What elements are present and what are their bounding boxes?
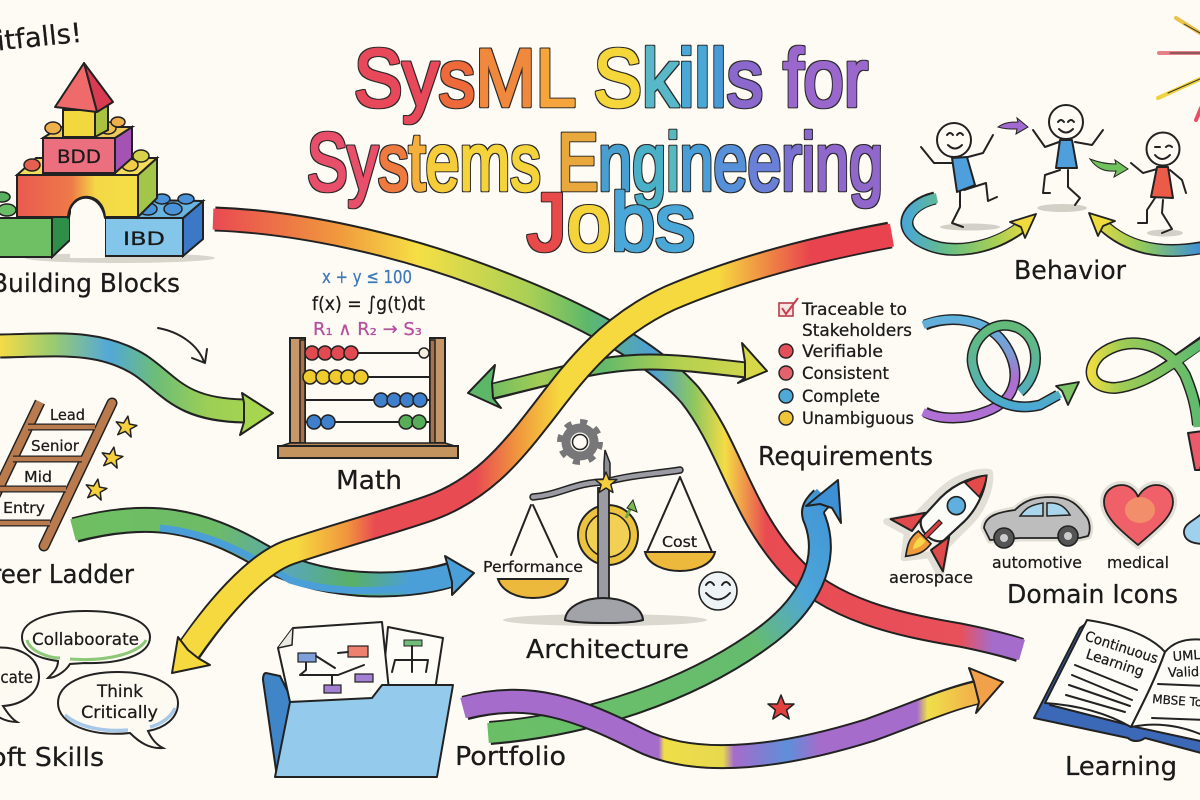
document: small diagram [382,627,443,690]
rainbow arch block [17,150,157,258]
loop ribbons [923,320,1200,470]
document: block diagram [278,622,390,702]
blue IBD block [105,194,203,256]
ladder [0,402,112,548]
bubble: think critically: Critically [81,703,158,723]
pan labels: Performance [483,558,583,576]
label: domain icons: Domain Icons [1007,580,1178,610]
ribbon: blocks to learning [213,219,1022,650]
left page [1045,620,1165,727]
equations: x + y ≤ 100 [322,267,412,288]
balance beam [533,470,680,497]
checklist text [801,300,914,429]
label: learning: Learning [1065,752,1177,782]
panel: domain icons [877,445,1200,610]
bubble: communicate [0,648,39,722]
checkbox [779,298,798,316]
pan labels: Cost [662,533,697,551]
ladder rung labels: Senior [31,437,80,455]
dancer one [921,123,997,227]
stars [84,414,138,501]
domain labels: medical [1107,553,1169,572]
equations: R₁ ∧ R₂ → S₃ [313,319,422,340]
gear [560,422,600,462]
folder back [263,673,300,777]
panel: learning book [1034,620,1200,782]
panel: soft skills [0,611,178,773]
ribbon: career ladder to architecture [73,520,474,595]
label: behavior: Behavior [1014,256,1126,286]
ribbon: portfolio to requirements [488,480,841,733]
dancer two [1033,105,1103,205]
dancer three [1131,132,1186,233]
ladder rung labels: Entry [3,499,45,517]
right page [1131,639,1200,736]
hand-drawn pointer arrow [158,328,207,363]
bubble: think critically: Think [96,682,143,702]
book text: Learning [1084,647,1146,680]
right pan [645,477,715,571]
ribbon: pitfalls to math [0,345,273,435]
checklist text: Traceable to [801,300,907,320]
title [307,33,883,268]
BDD block [43,117,132,173]
ground shadow [503,614,707,626]
panel: architecture [483,422,737,665]
balance post and base [565,450,643,623]
red star [768,695,794,719]
book cover [1034,622,1200,754]
panel: building blocks [0,63,215,263]
checklist text: Verifiable [802,342,883,362]
checklist text: Unambiguous [802,409,914,429]
folder front [275,685,453,777]
equations: f(x) = ∫g(t)dt [312,293,425,315]
label: math: Math [336,466,402,496]
pan labels [483,533,697,576]
domain labels: automotive [992,553,1082,572]
equations [312,267,425,340]
block shadow [25,253,215,263]
blue IBD block: IBD [123,228,165,250]
panel: requirements [758,298,933,472]
title: SysML Skills for [354,33,868,124]
yellow tower [63,106,108,137]
loop: blue to purple [923,320,1015,418]
bubble: collaborate: Collaboorate [32,630,139,650]
icon: blue drop [1184,510,1200,544]
smiley [699,572,737,610]
panel: math [278,267,458,496]
ground shadows [940,204,1183,236]
curved arrow left [907,198,1036,249]
bubble: think critically [58,672,178,748]
title: Systems Engineering [307,117,883,208]
label: portfolio: Portfolio [455,742,566,772]
domain labels [889,553,1169,587]
star pivot [595,472,617,492]
checklist dots [779,344,793,425]
roof [55,63,113,112]
title: Jobs [527,177,695,268]
ladder rung labels: Mid [24,468,52,486]
label: architecture: Architecture [526,635,689,665]
icon: rocket [877,445,1017,585]
coin [578,500,638,565]
BDD block: BDD [57,146,101,168]
small arrow: purple [998,118,1028,134]
sunburst rays [1158,18,1200,120]
ladder rung labels: Lead [50,406,85,424]
bubble: collaborate [22,611,150,678]
ribbon: portfolio to learning [463,668,1003,757]
abacus [278,338,458,458]
icon: heart [1104,485,1173,545]
panel: career ladder [0,402,138,590]
checklist text: Stakeholders [802,321,912,341]
panel: portfolio [263,622,566,777]
book lines [1066,665,1200,720]
loop: green to blue arrow [972,325,1079,407]
label: requirements: Requirements [758,442,933,472]
ribbon: behavior to soft skills [172,235,892,673]
panel: behavior [907,105,1200,286]
icon: car [984,497,1090,548]
domain labels: aerospace [889,568,973,587]
twist: rainbow to green [1092,340,1200,470]
double arrow: math and requirements [468,343,767,408]
checklist text: Complete [802,387,880,407]
green block [0,192,70,257]
small arrow: green [1090,159,1128,177]
book text [1083,629,1200,711]
ladder rung labels [3,406,85,517]
book text: Continuous [1083,629,1160,667]
curved arrow right [1089,213,1200,251]
checklist text: Consistent [802,364,889,384]
left pan [498,505,568,598]
